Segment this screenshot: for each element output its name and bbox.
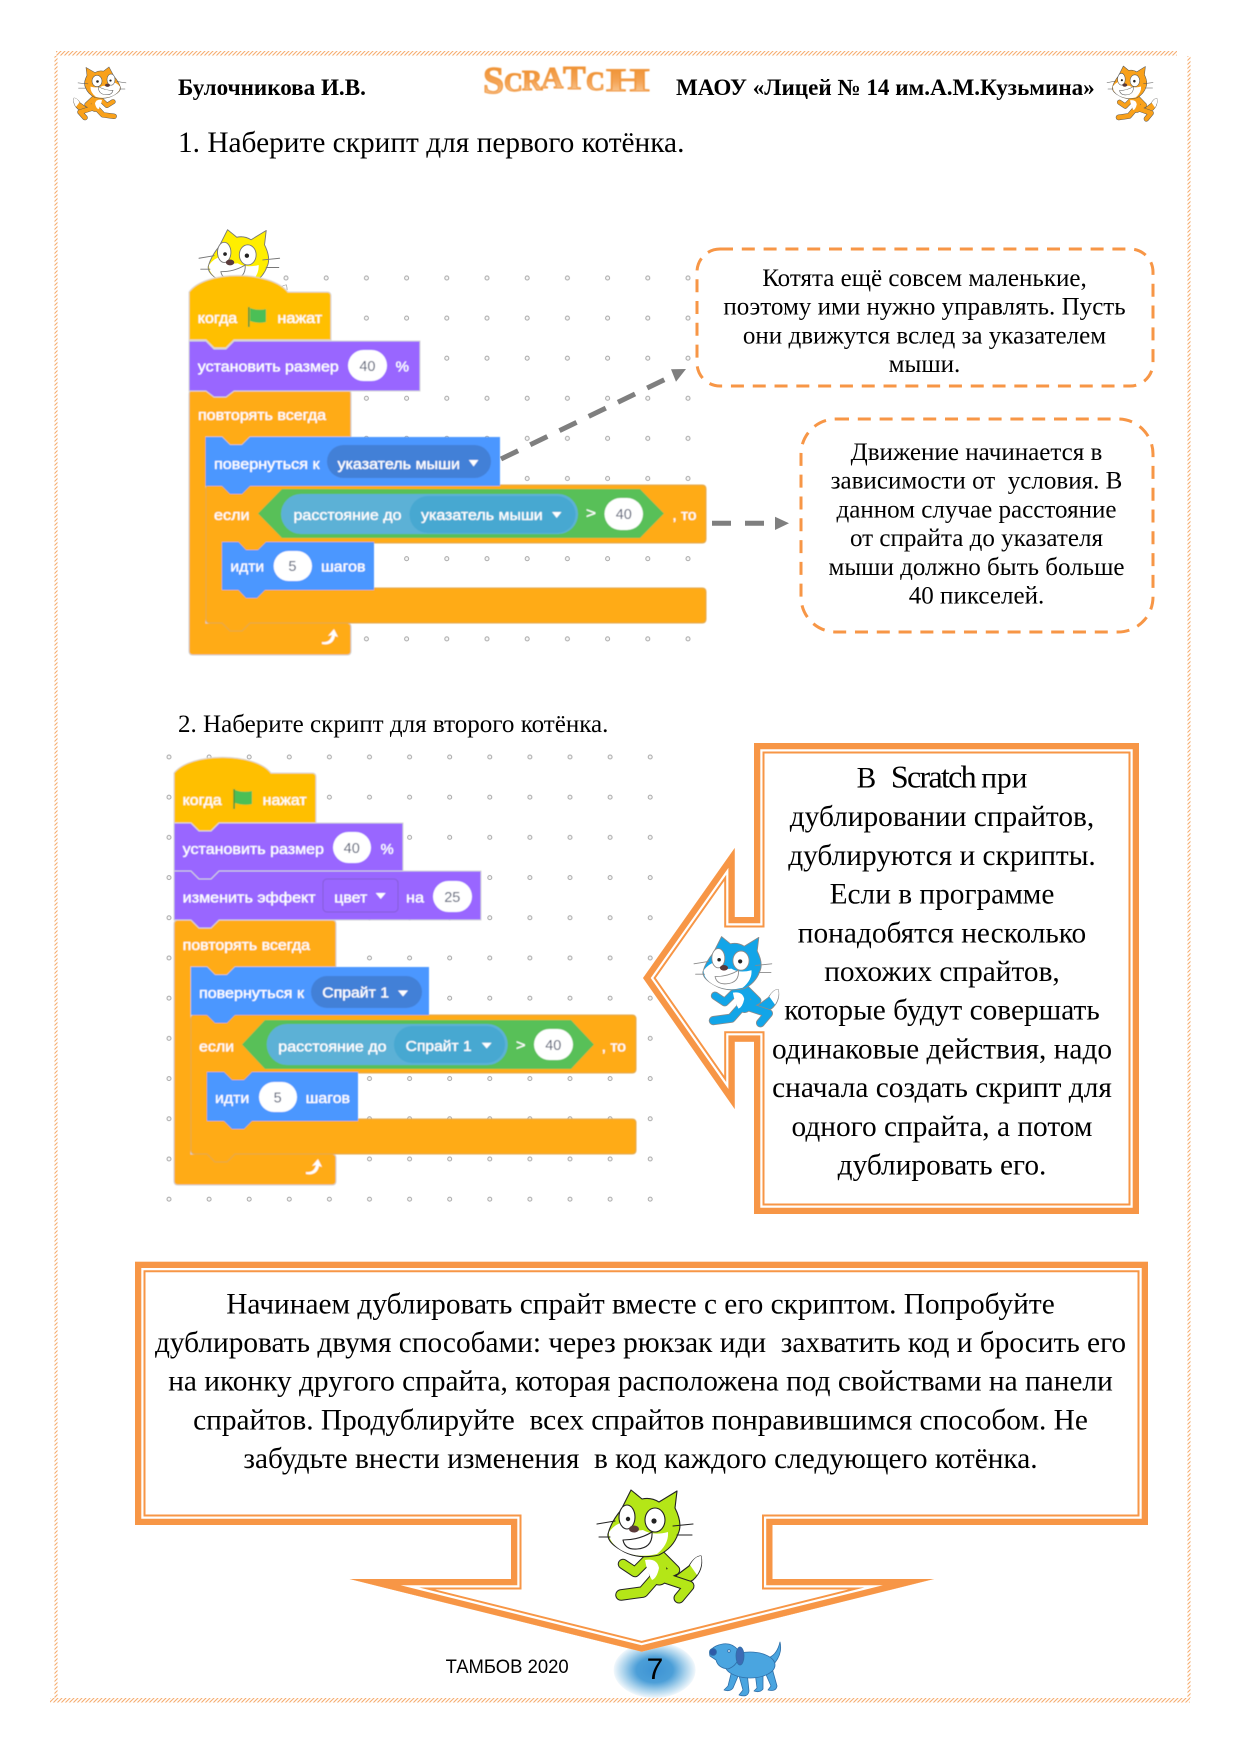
block: set size <box>189 341 420 397</box>
page number badge: 7 <box>647 1653 663 1686</box>
callout 1 <box>697 249 1153 386</box>
logo: Scratch: H <box>606 62 650 98</box>
heading 2: 2. Наберите скрипт для второго котёнка. <box>178 711 608 738</box>
logo: Scratch: C <box>586 67 605 96</box>
condition: > <box>586 506 596 522</box>
block: change effect: цвет <box>334 891 368 907</box>
callout text: duplication: дублировать его. <box>838 1150 1046 1182</box>
condition <box>242 1020 594 1069</box>
block: if: если <box>199 1040 234 1056</box>
author name: Булочникова И.В. <box>178 74 366 100</box>
block: change effect: 25 <box>444 890 460 906</box>
block: set size: 40 <box>359 359 375 375</box>
icon: blue dog <box>710 1642 781 1696</box>
callout 2: данном случае расстояние <box>836 496 1117 523</box>
block: forever: повторять всегда <box>183 938 311 954</box>
callout text: start duplicating: спрайтов. Продублируйте всех спрайтов понравившимся способом. Не <box>193 1404 1088 1436</box>
block: when flag clicked: нажат <box>277 311 323 327</box>
block: move: идти <box>215 1091 249 1107</box>
block: turn towards: Спрайт 1 <box>322 986 389 1002</box>
block: set size: 40 <box>344 841 360 857</box>
condition: Спрайт 1 <box>406 1039 472 1055</box>
block: set size: установить размер <box>183 842 324 858</box>
block: set size: % <box>396 360 409 376</box>
block: turn towards <box>206 437 500 494</box>
icon: orange cat right <box>1107 66 1157 119</box>
block: move: шагов <box>321 560 366 576</box>
block: set size <box>174 823 403 879</box>
callout text: duplication: которые будут совершать <box>784 995 1100 1027</box>
block: set size: % <box>381 842 394 858</box>
icon: yellow cat behind script <box>198 229 288 290</box>
logo: Scratch: S <box>483 60 504 102</box>
callout text: duplication: понадобятся несколько <box>798 917 1086 949</box>
callout text: start duplicating: на иконку другого спрайта, которая расположена под свойствами на панели <box>168 1366 1113 1398</box>
page number badge <box>614 1642 696 1698</box>
icon: green flag <box>248 307 266 327</box>
block: when flag clicked <box>174 757 316 831</box>
script 2: workspace dots <box>149 737 670 1219</box>
script 2 <box>174 757 636 1185</box>
condition: > <box>516 1038 526 1054</box>
callout: down arrow box <box>135 1262 1148 1652</box>
callout 2: зависимости от условия. В <box>831 468 1122 495</box>
school name: МАОУ «Лицей № 14 им.А.М.Кузьмина» <box>676 74 1095 100</box>
callout 1: мыши. <box>889 351 960 378</box>
script 1 <box>189 276 706 655</box>
callout 1: Котята ещё совсем маленькие, <box>762 265 1087 292</box>
callout 2: Движение начинается в <box>851 439 1102 466</box>
block: if: , то <box>672 508 696 524</box>
condition: указатель мыши <box>421 508 543 524</box>
block: forever <box>189 390 351 655</box>
callout 2: от спрайта до указателя <box>850 525 1103 552</box>
block: set size: установить размер <box>198 360 339 376</box>
block: move <box>207 1072 358 1129</box>
block: move: 5 <box>288 559 296 575</box>
callout text: duplication: сначала создать скрипт для <box>772 1072 1112 1104</box>
block: if <box>206 485 706 631</box>
block: move: 5 <box>274 1090 282 1106</box>
block: move: шагов <box>306 1091 350 1107</box>
callout text: start duplicating: забудьте внести изменения в код каждого следующего котёнка. <box>243 1443 1038 1475</box>
block: turn towards: повернуться к <box>199 986 305 1002</box>
callout text: duplication: дублируются и скрипты. <box>788 840 1096 872</box>
callout 2 <box>801 419 1153 632</box>
script 1: workspace dots <box>266 258 692 659</box>
callout text: duplication: В Scratch при <box>857 758 1028 794</box>
icon: green cat <box>597 1490 702 1598</box>
callout text: duplication: одного спрайта, а потом <box>792 1111 1092 1143</box>
callout 2: 40 пикселей. <box>909 582 1044 610</box>
icon: orange cat left <box>74 67 126 118</box>
callout text: duplication: дублировании спрайтов, <box>790 801 1094 833</box>
block: move: идти <box>230 560 264 576</box>
footer text: ТАМБОВ 2020 <box>446 1657 569 1678</box>
callout text: start duplicating: дублировать двумя способами: через рюкзак иди захватить код и бросить его <box>155 1327 1126 1359</box>
heading 1: 1. Наберите скрипт для первого котёнка. <box>178 127 684 159</box>
block: forever: повторять всегда <box>198 408 327 424</box>
logo: Scratch: A <box>541 60 564 95</box>
callout text: duplication: Если в программе <box>830 879 1054 911</box>
block: change effect: изменить эффект <box>183 891 316 907</box>
callout text: start duplicating: Начинаем дублировать спрайт вместе с его скриптом. Попробуйте <box>226 1288 1055 1320</box>
condition: расстояние до <box>278 1040 387 1056</box>
block: turn towards: указатель мыши <box>338 457 460 473</box>
block: when flag clicked: когда <box>198 311 238 327</box>
condition <box>258 489 664 538</box>
block: forever <box>174 920 336 1185</box>
block: turn towards: повернуться к <box>214 457 320 473</box>
block: when flag clicked <box>189 276 331 348</box>
icon: blue cat <box>694 937 779 1023</box>
callout text: duplication <box>772 758 1112 1182</box>
logo: Scratch: T <box>563 60 586 97</box>
block: move <box>222 542 374 598</box>
callout text: start duplicating <box>155 1288 1126 1475</box>
block: if: если <box>214 508 250 524</box>
callout 1: поэтому ими нужно управлять. Пусть <box>723 294 1126 321</box>
condition: 40 <box>545 1038 561 1054</box>
callout: arrow box <box>643 743 1139 1214</box>
icon: green flag <box>233 789 252 809</box>
block: when flag clicked: когда <box>183 793 223 809</box>
arrow: condition to callout 2 <box>712 517 789 530</box>
condition: расстояние до <box>294 508 402 524</box>
callout 1: они движутся вслед за указателем <box>743 322 1106 349</box>
callout text: duplication: похожих спрайтов, <box>824 956 1060 988</box>
logo: Scratch: C <box>504 68 523 97</box>
condition: 40 <box>616 507 632 523</box>
block: when flag clicked: нажат <box>263 793 307 809</box>
block: if: , то <box>602 1040 626 1056</box>
block: change effect: на <box>406 891 425 907</box>
callout text: duplication: одинаковые действия, надо <box>772 1033 1112 1065</box>
block: turn towards <box>191 967 429 1023</box>
arrow: turn block to callout 1 <box>501 369 686 459</box>
callout 2: мыши должно быть больше <box>828 554 1125 581</box>
logo: Scratch: R <box>522 66 543 97</box>
logo: Scratch <box>483 60 650 102</box>
block: if <box>191 1015 636 1162</box>
block: change effect <box>174 871 481 928</box>
